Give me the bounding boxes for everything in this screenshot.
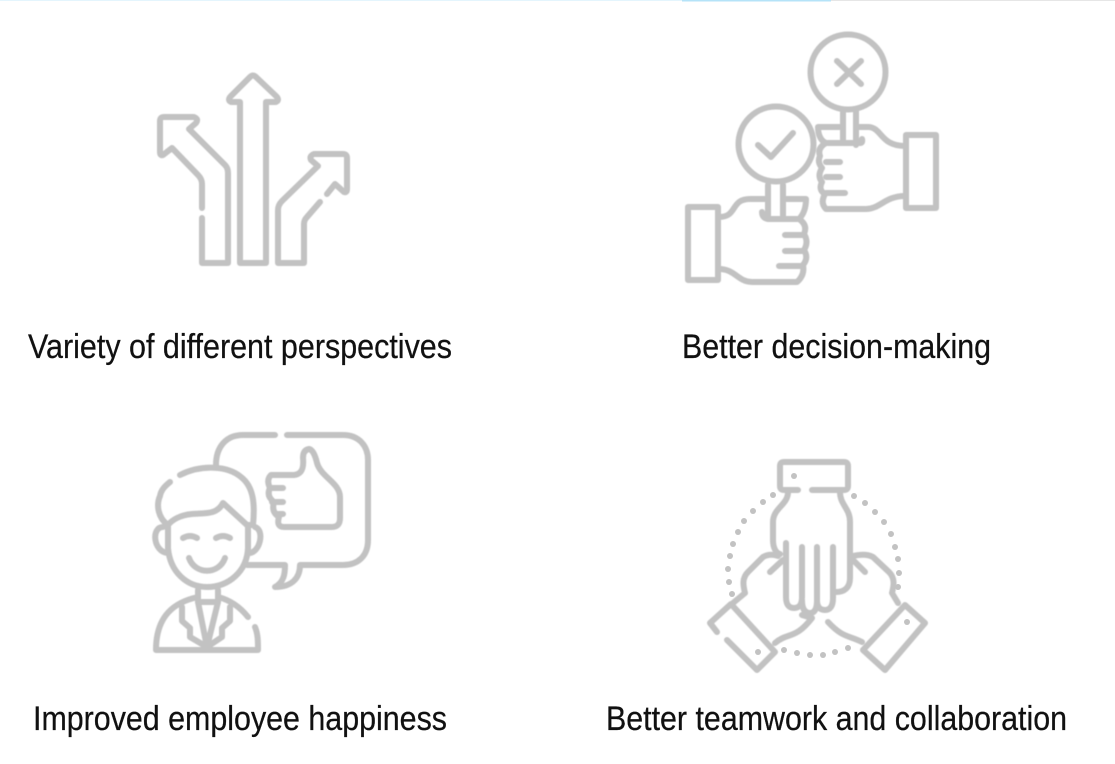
label: better teamwork and collaboration: Better teamwork and collaboration: [606, 700, 1067, 738]
panel: improved employee happiness: [33, 435, 447, 738]
icon: diverging arrows: [160, 76, 347, 263]
panel: variety of perspectives: [28, 76, 452, 366]
label: better decision-making: Better decision-making: [682, 328, 991, 366]
icon: hands holding check and cross signs: [688, 34, 936, 282]
icon: smiling employee with thumbs-up speech bubble: [155, 435, 368, 650]
panel: better teamwork and collaboration: [606, 462, 1067, 738]
label: improved employee happiness: Improved employee happiness: [33, 700, 447, 738]
icon: three stacked hands in dotted circle: [710, 462, 925, 670]
panel: better decision-making: [682, 34, 991, 366]
label: variety of different perspectives: Variety of different perspectives: [28, 328, 452, 366]
